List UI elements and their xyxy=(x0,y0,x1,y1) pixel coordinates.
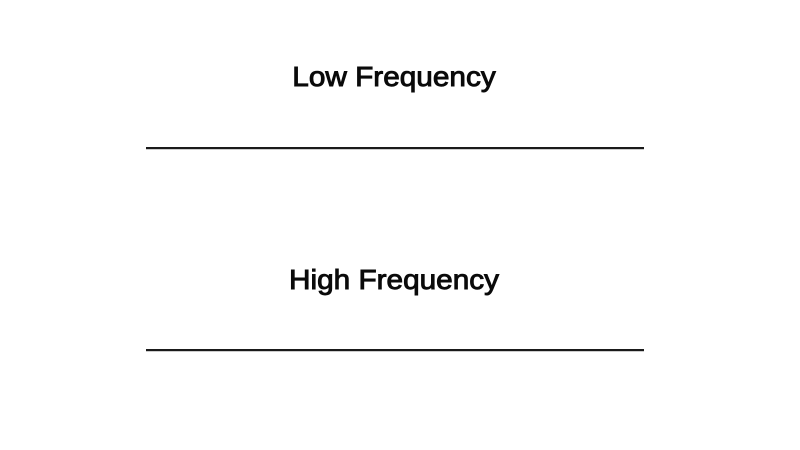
heading: low frequency: Low Frequency xyxy=(292,61,496,92)
line: high frequency baseline xyxy=(146,349,644,351)
line: low frequency baseline xyxy=(146,147,644,149)
heading: high frequency: High Frequency xyxy=(289,264,499,295)
